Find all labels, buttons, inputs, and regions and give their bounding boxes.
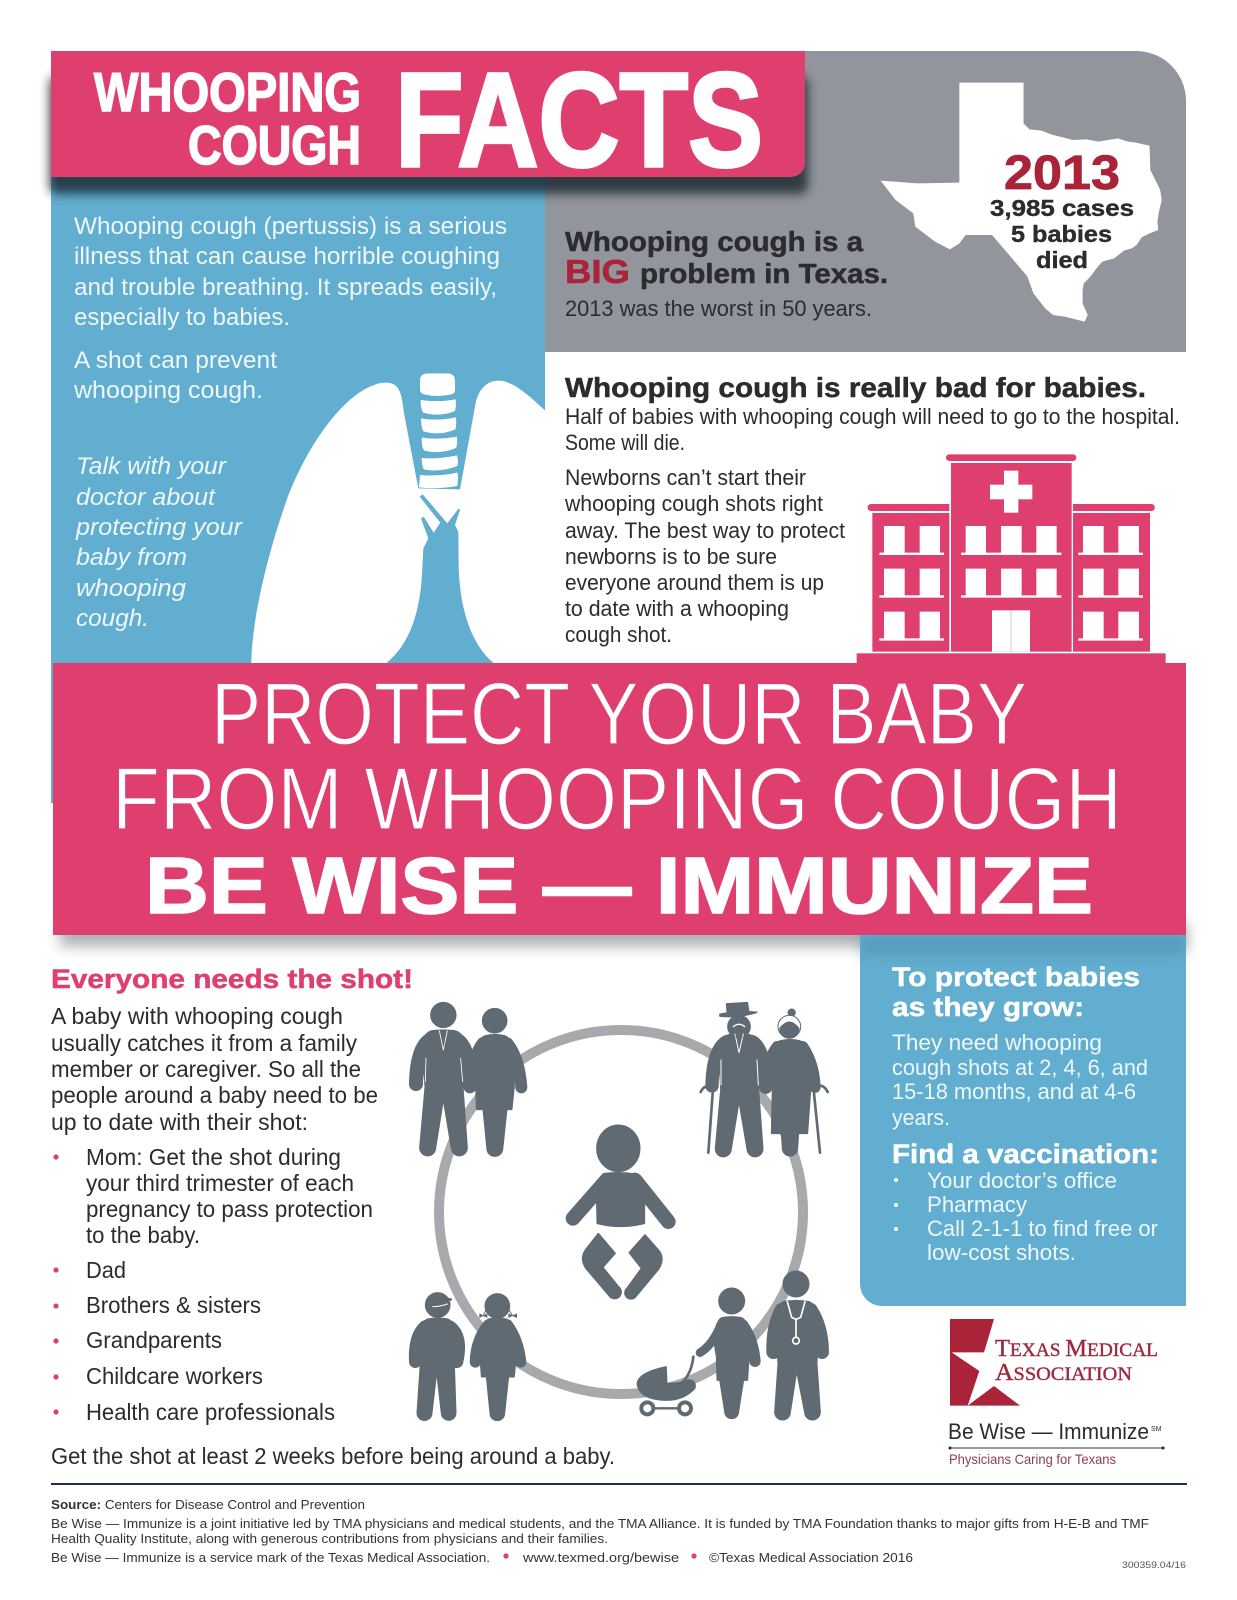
panel: blue intro background bbox=[51, 170, 545, 803]
service mark line: ©Texas Medical Association 2016 bbox=[709, 1551, 913, 1565]
icon: woman bbox=[470, 1009, 521, 1156]
stat: cases and deaths: 5 babies bbox=[1011, 221, 1112, 247]
text block: find a vaccination bbox=[892, 1139, 1159, 1265]
icon: grandfather bbox=[701, 1003, 766, 1157]
stat: cases and deaths: died bbox=[1036, 247, 1088, 273]
italic text block: Talk with your bbox=[76, 453, 227, 480]
bullet list: who needs the shot: to the baby. bbox=[86, 1222, 200, 1248]
banner call to action: BE WISE — IMMUNIZE bbox=[145, 841, 1093, 930]
text block: find a vaccination: low-cost shots. bbox=[927, 1240, 1076, 1265]
italic text block: baby from bbox=[76, 544, 187, 571]
text block: newborns: Newborns can’t start their bbox=[565, 465, 806, 490]
heading: big problem in Texas: problem in Texas. bbox=[640, 258, 888, 289]
italic text block: cough. bbox=[76, 605, 149, 632]
title: whooping cough: COUGH bbox=[188, 114, 361, 176]
icon: boy with cap bbox=[415, 1293, 459, 1420]
heading: big problem in Texas: BIG bbox=[565, 253, 630, 290]
text block: find a vaccination: Your doctor’s office bbox=[927, 1168, 1117, 1193]
service mark line: Be Wise — Immunize is a service mark of the Texas Medical Association. bbox=[51, 1551, 490, 1565]
footer text bbox=[51, 1498, 1186, 1571]
heading: really bad for babies: Whooping cough is really bad for babies. bbox=[565, 372, 1146, 403]
text block: find a vaccination: Call 2-1-1 to find free or bbox=[927, 1216, 1158, 1241]
text block: newborns: newborns is to be sure bbox=[565, 544, 777, 569]
job number: 300359.04/16 bbox=[1122, 1560, 1186, 1571]
text block: family caregivers: A baby with whooping cough bbox=[51, 1003, 343, 1029]
icon: grandmother bbox=[766, 1009, 828, 1156]
stat: 2013: 2013 bbox=[1004, 147, 1120, 200]
stat: cases and deaths bbox=[990, 195, 1134, 273]
banner headline bbox=[112, 664, 1122, 848]
text block: two weeks reminder: Get the shot at least 2 weeks before being around a baby. bbox=[51, 1443, 615, 1469]
bullet list: who needs the shot: your third trimester of each bbox=[86, 1170, 354, 1196]
stat: cases and deaths: 3,985 cases bbox=[990, 195, 1134, 221]
text block: protect babies as they grow bbox=[892, 962, 1148, 1130]
icon: lungs bbox=[251, 373, 545, 663]
text block: protect babies as they grow: cough shots at 2, 4, 6, and bbox=[892, 1055, 1148, 1080]
icon: Texas map with stats bbox=[881, 83, 1162, 322]
icon: hospital bbox=[857, 454, 1166, 667]
title banner bbox=[51, 46, 805, 195]
italic text block bbox=[75, 453, 243, 632]
text block: find a vaccination: Find a vaccination: bbox=[892, 1139, 1159, 1169]
title: whooping cough bbox=[94, 61, 361, 176]
icon: doctor with stethoscope bbox=[773, 1271, 822, 1420]
banner headline: PROTECT YOUR BABY bbox=[211, 664, 1027, 763]
icons: lower people and diaper bbox=[415, 1234, 822, 1420]
heading: big problem in Texas: Whooping cough is a bbox=[565, 226, 863, 257]
panel: grey Texas background bbox=[545, 51, 1186, 352]
service mark line: www.texmed.org/bewise bbox=[522, 1551, 679, 1565]
header shadow bbox=[49, 76, 808, 194]
text block: hospital statement: Some will die. bbox=[565, 430, 685, 455]
intro text block: A shot can prevent bbox=[74, 347, 277, 374]
bullet list: who needs the shot: Brothers & sisters bbox=[86, 1292, 261, 1318]
intro text block: and trouble breathing. It spreads easily, bbox=[74, 274, 497, 301]
banner shadow bbox=[60, 922, 1186, 946]
heading: everyone needs the shot: Everyone needs the shot! bbox=[51, 964, 413, 994]
initiative statement: Be Wise — Immunize is a joint initiative led by TMA physicians and medical students, and the TMA Alliance. It is funded by TMA Foundation thanks to major gifts from H-E-B and TMF bbox=[51, 1517, 1149, 1531]
text block: newborns: away. The best way to protect bbox=[565, 518, 845, 543]
text block: find a vaccination: Pharmacy bbox=[927, 1192, 1028, 1217]
italic text block: doctor about bbox=[76, 484, 216, 511]
heading: big problem in Texas: 2013 was the worst in 50 years. bbox=[565, 296, 872, 321]
logo name: ASSOCIATION bbox=[995, 1360, 1132, 1386]
text block: hospital statement: Half of babies with whooping cough will need to go to the hospital. bbox=[565, 404, 1180, 429]
title: whooping cough: WHOOPING bbox=[94, 61, 361, 123]
intro text block bbox=[73, 213, 507, 404]
bullet list: who needs the shot: Health care professionals bbox=[86, 1399, 335, 1425]
bullet list: who needs the shot bbox=[53, 1144, 373, 1425]
icons: upper people and baby bbox=[416, 1003, 828, 1226]
text block: newborns: to date with a whooping bbox=[565, 596, 789, 621]
logo: Texas Medical Association bbox=[948, 1319, 1164, 1467]
text block: family caregivers bbox=[51, 1003, 378, 1135]
bullet list: who needs the shot: Grandparents bbox=[86, 1327, 222, 1353]
heading: big problem in Texas bbox=[565, 226, 888, 321]
banner headline: FROM WHOOPING COUGH bbox=[112, 749, 1122, 848]
icon: girl with bows bbox=[475, 1294, 521, 1420]
service mark line bbox=[51, 1551, 913, 1565]
text block: newborns: cough shot. bbox=[565, 622, 672, 647]
logo name: TEXAS MEDICAL bbox=[995, 1336, 1158, 1362]
intro text block: Whooping cough (pertussis) is a serious bbox=[74, 213, 507, 240]
italic text block: whooping bbox=[76, 575, 187, 602]
text block: family caregivers: people around a baby need to be bbox=[51, 1082, 378, 1108]
icon: star flag bbox=[950, 1319, 1020, 1406]
intro text block: especially to babies. bbox=[74, 304, 290, 331]
initiative statement: Health Quality Institute, along with generous contributions from physicians and their families. bbox=[51, 1532, 608, 1546]
text block: family caregivers: up to date with their shot: bbox=[51, 1109, 308, 1135]
logo name bbox=[995, 1336, 1158, 1386]
text block: newborns: everyone around them is up bbox=[565, 570, 824, 595]
icon: man in suit bbox=[416, 1003, 470, 1156]
text block: protect babies as they grow: years. bbox=[892, 1105, 950, 1130]
main banner bbox=[53, 663, 1186, 935]
text block: protect babies as they grow: To protect babies bbox=[892, 962, 1140, 992]
initiative statement bbox=[51, 1517, 1149, 1546]
intro text block: illness that can cause horrible coughing bbox=[74, 243, 500, 270]
text block: newborns: whooping cough shots right bbox=[564, 491, 823, 516]
bullet list: who needs the shot: Dad bbox=[86, 1257, 126, 1283]
logo: Texas Medical Association: Physicians Caring for Texans bbox=[949, 1451, 1116, 1467]
logo: Texas Medical Association: SM bbox=[1151, 1426, 1162, 1433]
text block: protect babies as they grow: They need whooping bbox=[892, 1030, 1102, 1055]
logo tagline: Be Wise — Immunize bbox=[948, 1419, 1149, 1444]
title: facts: FACTS bbox=[395, 46, 763, 195]
text block: family caregivers: usually catches it from a family bbox=[51, 1030, 357, 1056]
intro text block: whooping cough. bbox=[73, 377, 263, 404]
panel: blue protect babies background bbox=[860, 935, 1186, 1306]
bullet list: who needs the shot: pregnancy to pass protection bbox=[86, 1196, 373, 1222]
icon: baby body bbox=[573, 1125, 668, 1226]
text block: protect babies as they grow: 15-18 months, and at 4-6 bbox=[892, 1079, 1136, 1104]
bullet list: who needs the shot: Mom: Get the shot during bbox=[86, 1144, 341, 1170]
italic text block: protecting your bbox=[75, 514, 243, 541]
text block: hospital statement bbox=[565, 404, 1180, 455]
icon: mother with stroller bbox=[637, 1288, 755, 1418]
text block: family caregivers: member or caregiver. So all the bbox=[51, 1056, 361, 1082]
icon: baby diaper legs bbox=[583, 1234, 662, 1299]
bullet list: who needs the shot: Childcare workers bbox=[86, 1363, 263, 1389]
source line: Source: Centers for Disease Control and Prevention bbox=[51, 1498, 365, 1512]
text block: newborns bbox=[564, 465, 845, 647]
chart: ring of protection around baby bbox=[415, 1003, 828, 1420]
text block: protect babies as they grow: as they grow: bbox=[892, 992, 1084, 1022]
